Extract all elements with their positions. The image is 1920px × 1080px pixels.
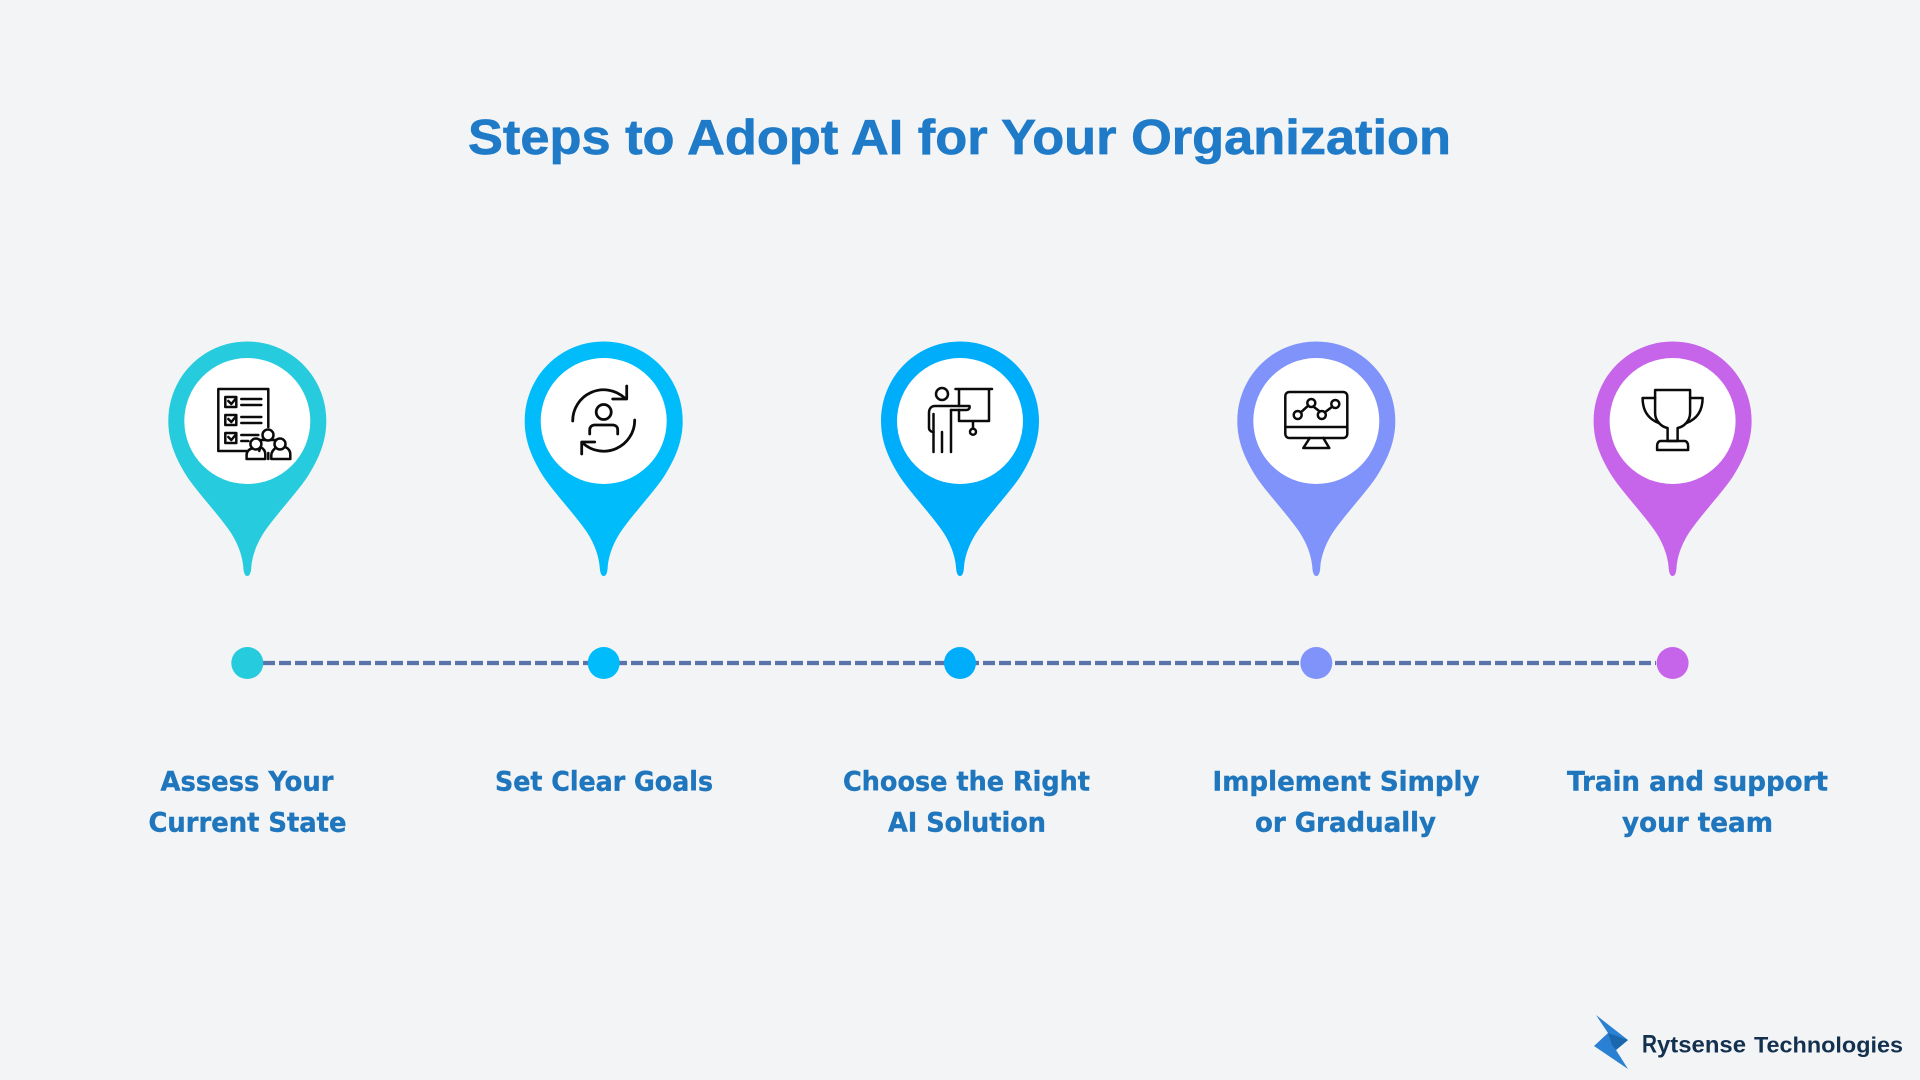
label: step 1: Assess Your xyxy=(160,766,334,798)
label: step 5: your team xyxy=(1622,808,1773,838)
pin: step 1 assess xyxy=(168,342,326,576)
timeline xyxy=(231,647,1689,679)
icon: person with cycle arrows xyxy=(573,386,635,454)
label: step 5: Train and support xyxy=(1567,766,1828,798)
label: step 1 xyxy=(148,766,346,838)
label: step 5 xyxy=(1567,766,1828,838)
icon: presenter with board xyxy=(929,388,992,452)
pin: step 2 goals xyxy=(525,342,683,576)
label: step 3: AI Solution xyxy=(888,808,1046,838)
icon: checklist with team xyxy=(218,389,290,459)
title: Steps to Adopt AI for Your Organization xyxy=(468,111,1451,165)
timeline dot 5 xyxy=(1657,647,1689,679)
label: step 1: Current State xyxy=(148,808,346,838)
timeline dot 1 xyxy=(231,647,263,679)
pin: step 5 train xyxy=(1594,342,1752,576)
logo wordmark: ytsense xyxy=(1657,1032,1746,1058)
timeline dot 2 xyxy=(588,647,620,679)
icon: monitor with line chart xyxy=(1285,392,1347,448)
label: step 3: Choose the Right xyxy=(843,766,1090,798)
logo wordmark: R xyxy=(1642,1031,1657,1059)
label: step 4 xyxy=(1212,766,1480,838)
icon: trophy xyxy=(1643,390,1703,450)
label: step 4: or Gradually xyxy=(1255,808,1436,838)
icon: logo mark xyxy=(1594,1015,1628,1069)
pin: step 4 implement xyxy=(1237,342,1395,576)
timeline dot 3 xyxy=(944,647,976,679)
timeline dot 4 xyxy=(1300,647,1332,679)
label: step 4: Implement Simply xyxy=(1212,766,1480,798)
pin: step 3 choose xyxy=(881,342,1039,576)
logo wordmark xyxy=(1642,1031,1903,1059)
label: step 2: Set Clear Goals xyxy=(495,766,713,798)
logo wordmark: Technologies xyxy=(1754,1033,1903,1058)
label: step 3 xyxy=(843,766,1090,838)
logo xyxy=(1594,1015,1903,1069)
